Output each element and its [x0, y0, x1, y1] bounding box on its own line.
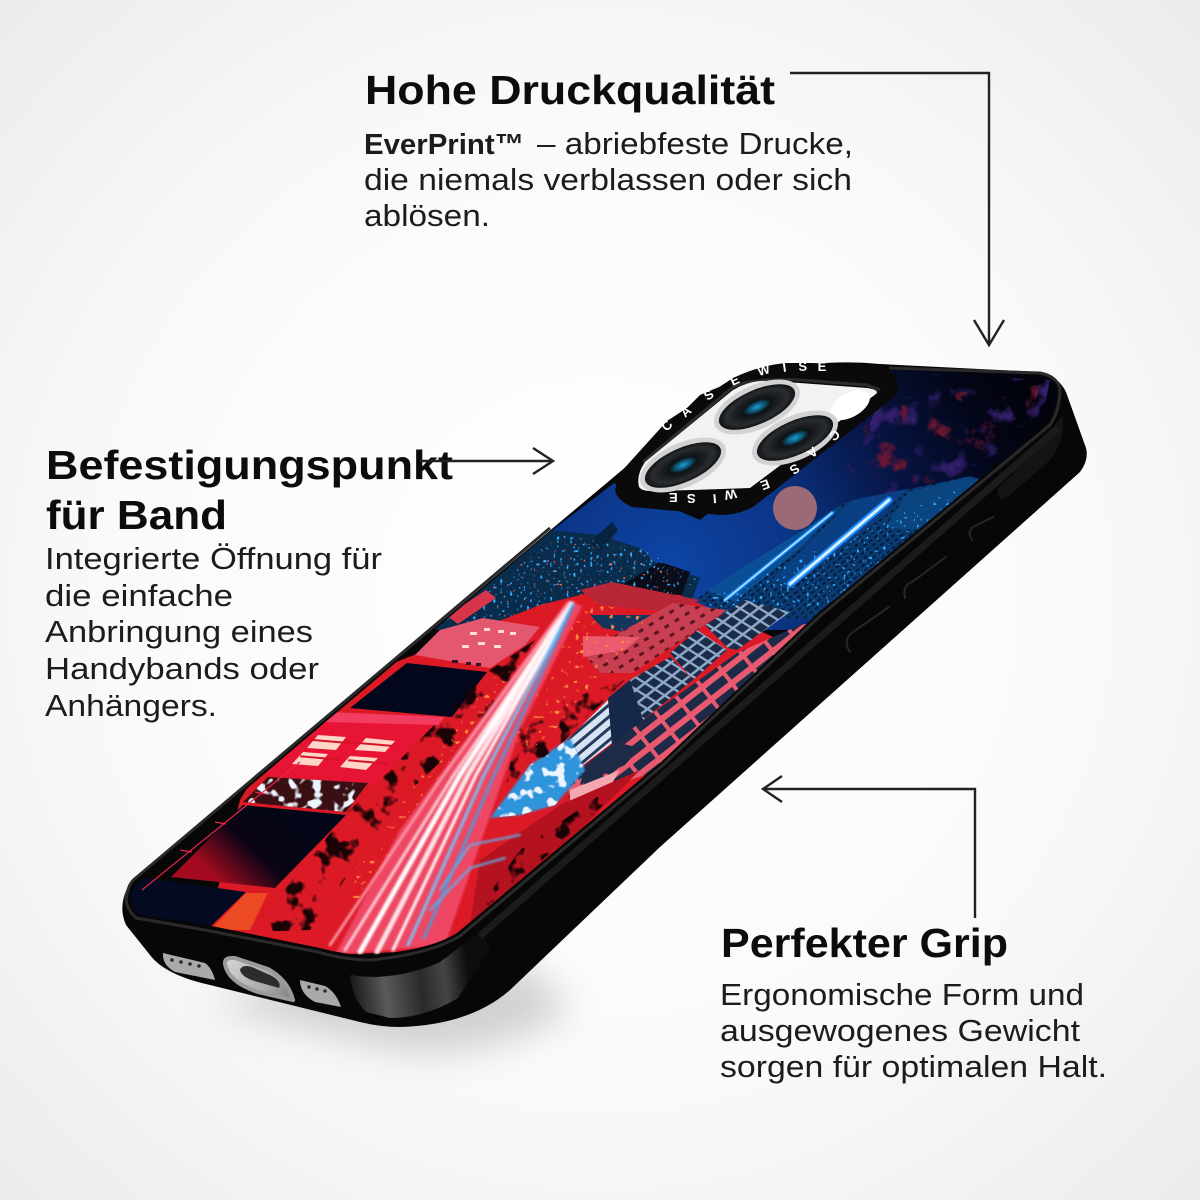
glass block middle [670, 630, 727, 680]
right speaker [300, 980, 341, 1007]
body text: Ergonomische Form und [720, 977, 1084, 1012]
callout: strap attachment: Anbringung eines [45, 614, 313, 649]
rim around print [126, 368, 1060, 960]
flash [825, 384, 875, 426]
striped white face [567, 700, 612, 766]
navy corner block [131, 878, 246, 926]
callout: print quality: die niemals verblassen oder sich [364, 162, 852, 197]
nebula [860, 374, 1050, 493]
bottom ports [163, 953, 341, 1007]
callout: strap attachment: Handybands oder [45, 651, 319, 686]
side sheen [480, 428, 1058, 936]
dark side face [608, 680, 643, 745]
ring brand text top: CASEWISE [658, 359, 827, 434]
salmon lower building [568, 624, 807, 800]
callout: print quality: ablösen. [364, 198, 490, 233]
red ground base [200, 590, 780, 960]
heading: Perfekter Grip [721, 920, 1008, 966]
case body [122, 362, 1087, 1027]
dark block upper [350, 663, 487, 717]
callout: strap attachment: für Band [46, 492, 227, 538]
side grip bulge [998, 415, 1063, 499]
callout: grip: ausgewogenes Gewicht [720, 1013, 1080, 1048]
camera plate [638, 381, 877, 491]
lens right [744, 399, 846, 477]
sparks [517, 601, 644, 752]
heading: Befestigungspunkt [46, 442, 453, 488]
distant city [434, 530, 700, 630]
heading: Hohe Druckqualität [365, 67, 775, 113]
phone shadow [210, 965, 570, 1053]
callout: grip: sorgen für optimalen Halt. [720, 1049, 1107, 1084]
side buttons [847, 517, 993, 652]
dark palm trees [250, 640, 535, 932]
upper red roofs [580, 582, 700, 612]
left speaker [163, 953, 215, 980]
callout: print quality [364, 67, 853, 233]
glass block far [705, 600, 790, 650]
left edge signs [447, 590, 496, 624]
printed city artwork [125, 360, 1070, 960]
lens top [706, 368, 808, 446]
neon lines [725, 500, 889, 600]
mid red building [583, 603, 727, 673]
body text: EverPrint™ [364, 129, 524, 161]
left edge lines [142, 762, 300, 890]
street surface [335, 600, 582, 955]
callout: print quality: – abriebfeste Drucke, [537, 126, 853, 161]
callout: strap attachment: Anhängers. [45, 688, 217, 723]
corner gloss [350, 932, 490, 1018]
blue towers [695, 476, 1000, 620]
phone case illustration [122, 359, 1087, 1027]
blue white foliage [490, 738, 585, 818]
arrow: grip [763, 776, 975, 918]
body text: Integrierte Öffnung für [45, 541, 382, 576]
moon [773, 486, 817, 530]
lower right dark red [470, 770, 640, 925]
arrow: strap attachment [420, 448, 553, 474]
lens left [632, 426, 734, 504]
red building with windows [265, 715, 439, 785]
pink building [415, 618, 540, 668]
arrow: print quality [790, 73, 1004, 345]
callout: strap attachment: die einfache [45, 578, 233, 613]
tree band [243, 777, 368, 812]
light trails [330, 604, 573, 952]
dark block lower [171, 805, 346, 888]
ring brand text bottom: CASEWISE [669, 427, 843, 506]
usb port [225, 958, 293, 1000]
callout: strap attachment [45, 442, 453, 723]
curved balconies [580, 742, 632, 785]
glass block front [630, 657, 693, 720]
night sky [530, 370, 1034, 630]
callout: grip [720, 920, 1107, 1084]
camera ring [615, 363, 898, 515]
ring bevel [643, 380, 880, 462]
